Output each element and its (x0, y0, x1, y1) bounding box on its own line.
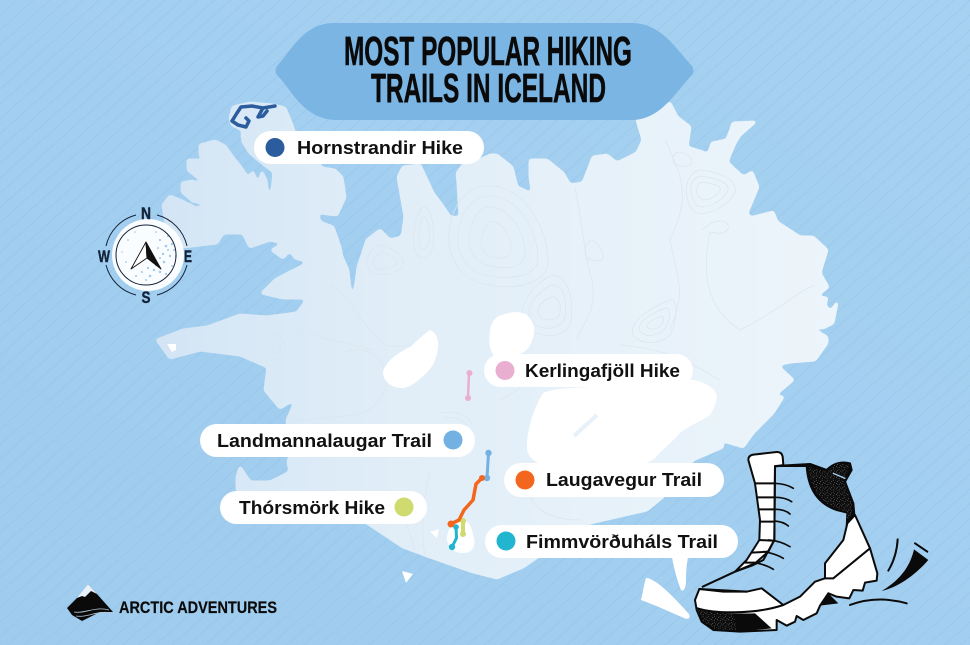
shard: white speech accent (641, 578, 690, 619)
title text (344, 28, 632, 111)
motion marks (850, 539, 928, 605)
label: Kerlingafjöll Hike (484, 354, 693, 387)
logo: Arctic Adventures: ARCTIC ADVENTURES (119, 599, 277, 617)
label: Thórsmörk Hike (220, 491, 427, 524)
label: Kerlingafjöll Hike: Kerlingafjöll Hike (525, 361, 680, 381)
compass arcs (106, 215, 187, 295)
boot heel and sole (695, 515, 877, 632)
label: Landmannalaugar Trail: Landmannalaugar Trail (217, 431, 432, 451)
boot toe speckle (697, 608, 772, 632)
cardinal letters (98, 204, 192, 307)
glaciers (167, 312, 717, 583)
boot tongue (703, 452, 783, 587)
label: Laugavegur Trail (504, 463, 724, 497)
title text: TRAILS IN ICELAND (371, 65, 606, 111)
compass (98, 204, 192, 307)
trail: Landmannalaugar (484, 450, 492, 481)
boot laces (753, 483, 793, 569)
contour lines (267, 140, 815, 555)
title banner (276, 23, 694, 120)
logo: Arctic Adventures (67, 584, 277, 621)
trail: Thórsmörk (460, 518, 466, 537)
cardinal letters: N (141, 204, 151, 223)
compass disc (112, 219, 184, 291)
label: Landmannalaugar Trail (200, 424, 475, 457)
label: Hornstrandir Hike (254, 131, 484, 164)
cardinal letters: E (184, 247, 192, 266)
trail: Laugavegur (448, 475, 485, 528)
label: Thórsmörk Hike: Thórsmörk Hike (239, 498, 385, 518)
label: Laugavegur Trail: Laugavegur Trail (546, 470, 702, 490)
logo mountain (67, 584, 113, 621)
glacier streak (574, 415, 597, 436)
trail: Fimmvörðuháls (449, 524, 459, 550)
boot illustration (695, 452, 928, 632)
boot sole patch (820, 593, 838, 606)
trail: Hornstrandir (232, 106, 275, 127)
label: Hornstrandir Hike: Hornstrandir Hike (297, 138, 463, 158)
label: Fimmvörðuháls Trail: Fimmvörðuháls Trail (526, 532, 718, 552)
map of Iceland (157, 103, 837, 578)
boot collar (775, 462, 854, 528)
cardinal letters: W (98, 247, 111, 266)
label: Fimmvörðuháls Trail (485, 525, 738, 591)
title text: MOST POPULAR HIKING (344, 28, 632, 74)
trail: Kerlingafjöll (465, 370, 472, 401)
needle (131, 242, 161, 269)
cardinal letters: S (142, 288, 150, 307)
